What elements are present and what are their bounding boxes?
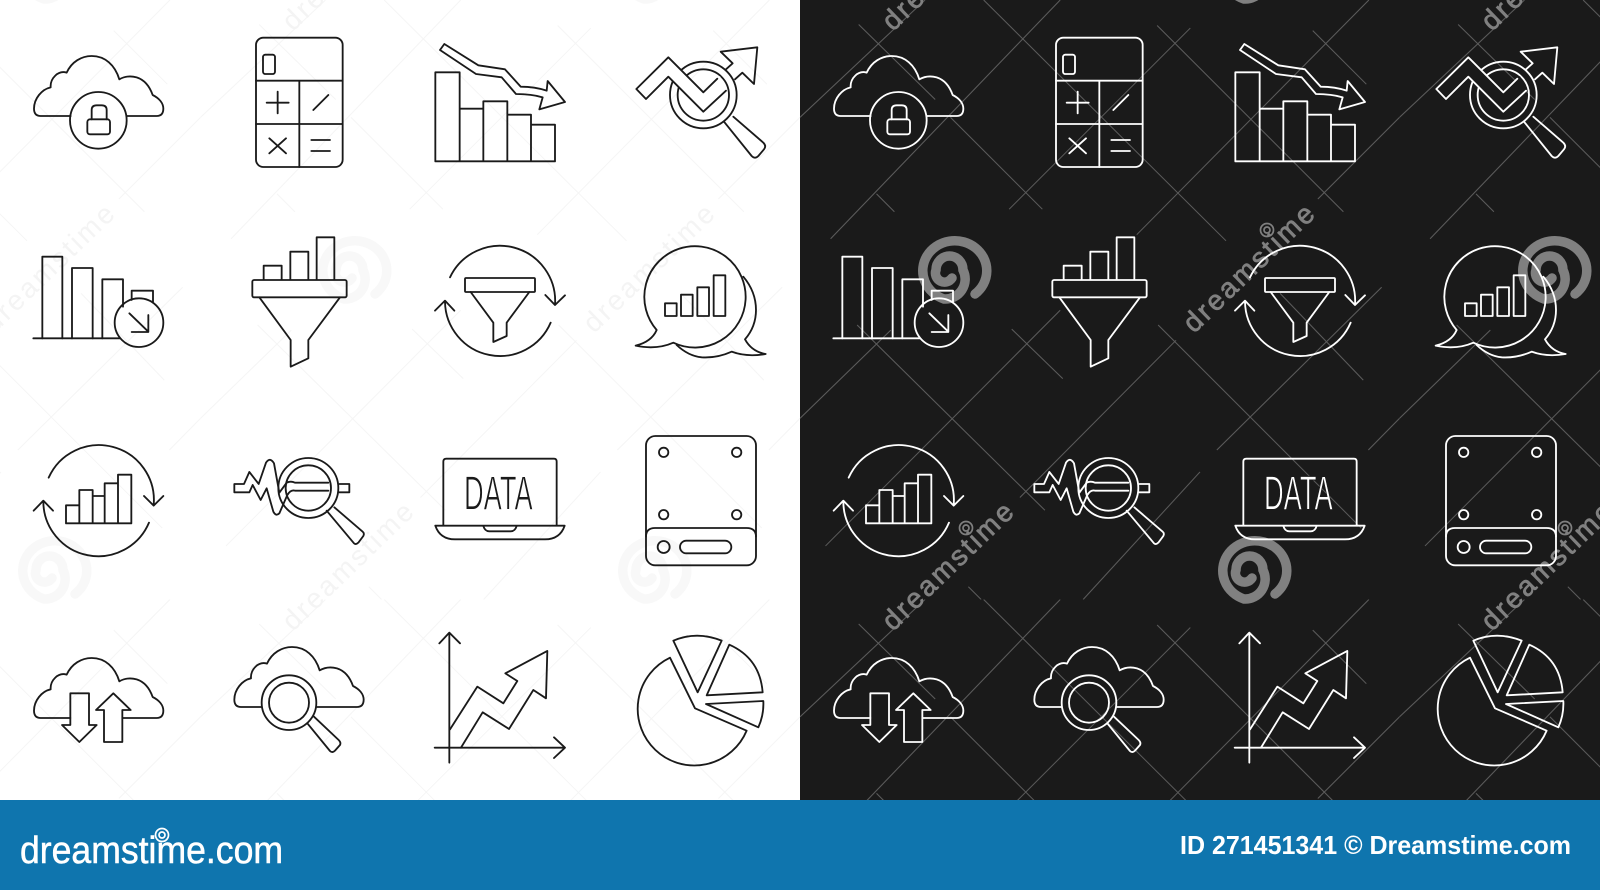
footer image id: ID 271451341 © Dreamstime.com bbox=[1180, 830, 1571, 860]
icon: solid state drive (dark) bbox=[1446, 436, 1556, 565]
panel: white icon set: dreamstime bbox=[276, 496, 419, 636]
icon: trend arrow under magnifier bbox=[636, 47, 765, 158]
icon: funnel with refresh arrows (dark) bbox=[1235, 246, 1365, 356]
icon: calculator (dark) bbox=[1056, 38, 1143, 167]
icon: calculator bbox=[256, 38, 343, 167]
icon: trend arrow under magnifier (dark) bbox=[1436, 47, 1565, 158]
icon: falling bar chart with arrow bbox=[435, 44, 565, 161]
icon: laptop with DATA screen: DATA bbox=[464, 467, 533, 520]
icon: bar chart with down-right timer bbox=[33, 257, 163, 347]
panel: white icon set bbox=[0, 0, 800, 800]
icon: rising arrow line chart (dark) bbox=[1235, 633, 1365, 763]
icon: cloud with up and down arrows (dark) bbox=[834, 658, 963, 742]
icon: pulse line under magnifier (dark) bbox=[1034, 458, 1164, 544]
icon: speech bubbles with bars (dark) bbox=[1436, 246, 1566, 357]
icon: cloud with magnifier bbox=[234, 647, 364, 752]
icon: pulse line under magnifier bbox=[234, 458, 364, 544]
icon: exploded pie chart (dark) bbox=[1438, 636, 1563, 765]
icon: bar chart with refresh arrows (dark) bbox=[834, 445, 963, 556]
panel: dark icon set: dreamstime bbox=[1177, 198, 1320, 338]
icon: speech bubbles with bars bbox=[636, 246, 766, 357]
footer bar bbox=[0, 800, 1600, 890]
icon: cloud with padlock bbox=[34, 56, 163, 149]
icon: funnel filtering bars bbox=[252, 237, 347, 367]
panel: dark icon set bbox=[800, 0, 1600, 800]
icon: bar chart with refresh arrows bbox=[34, 445, 163, 556]
footer logo: dreamstime.com bbox=[20, 830, 283, 872]
panel: dark icon set: dreamstime bbox=[876, 496, 1019, 636]
icon: cloud with magnifier (dark) bbox=[1034, 647, 1164, 752]
icon: funnel filtering bars (dark) bbox=[1052, 237, 1147, 367]
icon: laptop with DATA screen bbox=[435, 459, 565, 539]
icon: cloud with padlock (dark) bbox=[834, 56, 963, 149]
icon: laptop with DATA screen (dark): DATA bbox=[1264, 467, 1333, 520]
icon: funnel with refresh arrows bbox=[435, 246, 565, 356]
icon: falling bar chart with arrow (dark) bbox=[1235, 44, 1365, 161]
panel: white icon set: dreamstime bbox=[577, 198, 720, 338]
icon: exploded pie chart bbox=[638, 636, 763, 765]
icon: bar chart with down-right timer (dark) bbox=[833, 257, 963, 347]
icon: solid state drive bbox=[646, 436, 756, 565]
icon: rising arrow line chart bbox=[435, 633, 565, 763]
icon: laptop with DATA screen (dark) bbox=[1235, 459, 1365, 539]
icon: cloud with up and down arrows bbox=[34, 658, 163, 742]
